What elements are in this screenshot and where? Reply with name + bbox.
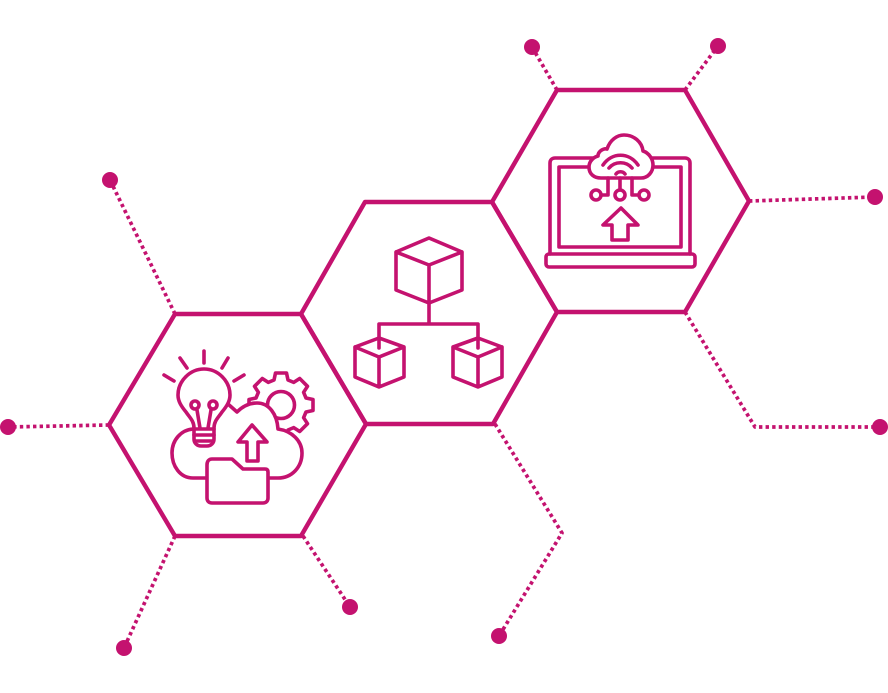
icon: top cube xyxy=(396,238,462,303)
icon: laptop xyxy=(546,158,695,267)
icon: light bulb xyxy=(164,351,244,446)
hierarchy connector xyxy=(379,303,478,348)
icon: wifi cloud xyxy=(589,135,653,178)
icon: circuit nodes xyxy=(591,178,649,200)
icon: right cube xyxy=(453,338,502,387)
hexagon: right xyxy=(492,90,749,312)
icon: cloud xyxy=(172,403,302,478)
hexagon: middle xyxy=(301,202,557,424)
icon: cube hierarchy xyxy=(355,238,502,387)
icon: upload arrow xyxy=(603,208,638,240)
hexagon: left xyxy=(109,314,366,536)
icon: folder xyxy=(207,459,268,503)
icon: upload arrow xyxy=(238,425,267,461)
icon: gear xyxy=(249,373,313,437)
icon: left cube xyxy=(355,338,404,387)
icon: laptop with wifi cloud xyxy=(546,135,695,267)
icon: idea bulb, gear, cloud upload and folder xyxy=(164,351,313,503)
